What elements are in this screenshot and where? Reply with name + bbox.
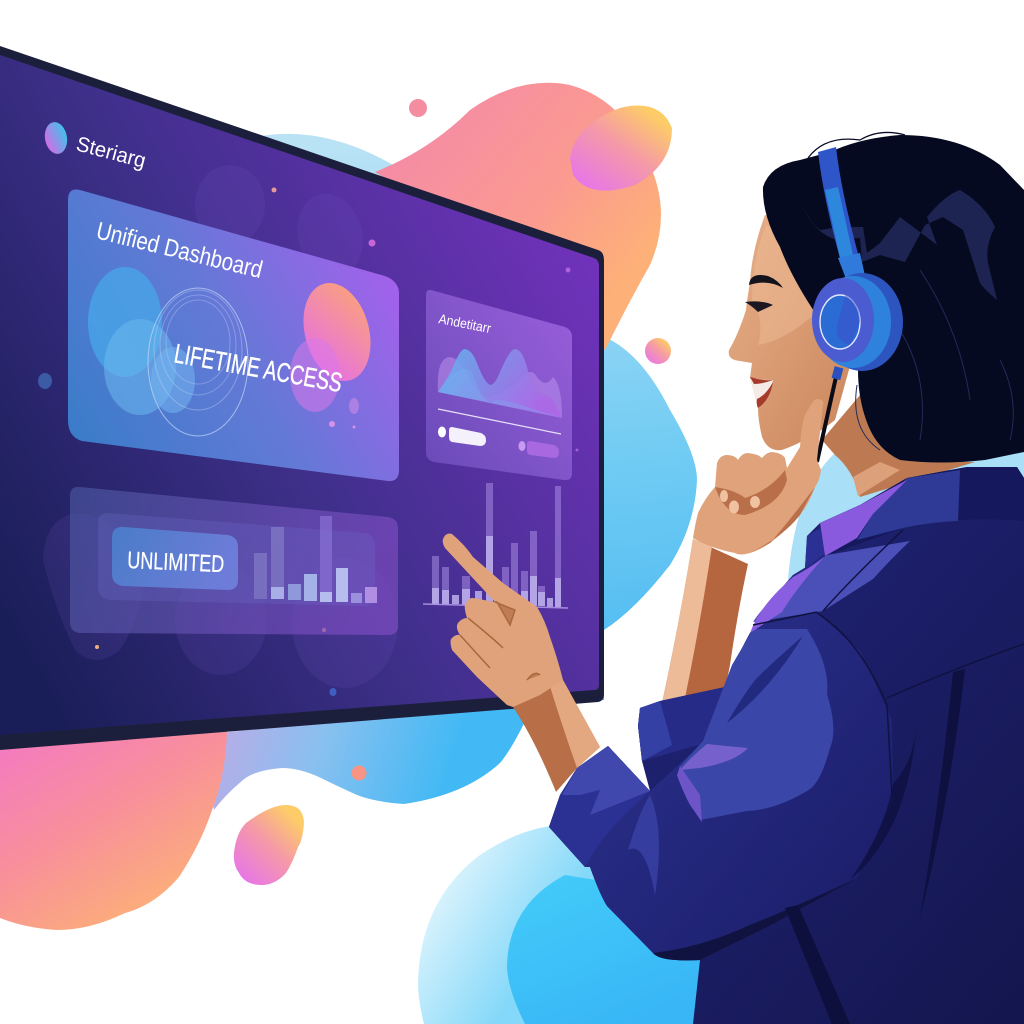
face	[729, 215, 860, 450]
blob: blue behind neck	[788, 450, 1024, 580]
neck light	[853, 462, 900, 496]
eyebrow	[749, 275, 783, 288]
panel title: Unified Dashboard	[94, 218, 265, 284]
logo mark	[44, 122, 68, 154]
panel: area chart	[426, 290, 572, 480]
faint background shapes	[43, 228, 396, 688]
blob: coral upper	[375, 83, 661, 350]
forearm pointing	[513, 680, 600, 792]
forearm light	[545, 670, 600, 768]
headphone band	[818, 147, 866, 286]
hair back strands	[808, 132, 905, 158]
hair highlight	[802, 190, 997, 300]
shoulder purple	[750, 556, 825, 633]
blob: coral lower left	[0, 730, 227, 930]
sleeve inner purple	[677, 766, 702, 822]
button label: UNLIMITED	[127, 547, 225, 578]
hand raised	[693, 399, 823, 554]
blob: bright blue bottom	[507, 875, 720, 1024]
lower cuff	[549, 746, 650, 867]
sleeve highlight	[680, 629, 833, 820]
screen surface	[0, 40, 610, 750]
eye	[745, 301, 773, 312]
blob: lower blue	[200, 700, 535, 810]
dot: coral top	[409, 99, 427, 117]
dot: coral bottom	[352, 766, 366, 780]
blob: pink yellow upper	[570, 106, 672, 191]
collar back panel	[805, 528, 825, 568]
dot: coral right	[645, 338, 671, 364]
screen bezel	[0, 46, 604, 750]
purple legend	[518, 441, 559, 458]
elbow folds	[628, 795, 659, 895]
lower cuff light	[562, 746, 650, 815]
shoulder strap	[785, 905, 850, 1024]
forearm raised	[662, 539, 748, 703]
lips	[750, 377, 773, 408]
inner panel	[98, 513, 375, 606]
bar chart: right	[423, 483, 568, 608]
divider line	[438, 409, 561, 434]
bars	[254, 516, 377, 603]
panel background	[426, 290, 572, 480]
hair	[763, 135, 1024, 462]
screen	[0, 40, 610, 750]
sleeve purple flash	[680, 744, 748, 770]
headphone ear cup	[812, 273, 903, 371]
sleeve dark sliver	[727, 636, 803, 723]
brand name: Steriarg	[74, 133, 148, 173]
circles decoration	[88, 267, 248, 436]
panel background	[70, 487, 398, 635]
floating dots	[38, 188, 578, 696]
violet ellipse	[290, 338, 340, 412]
dark fold sliver	[850, 719, 917, 880]
face light shading	[752, 225, 830, 345]
person	[443, 132, 1024, 1024]
panel: unlimited bars	[70, 487, 398, 635]
blob: pink yellow lower	[234, 805, 304, 885]
neck	[822, 395, 975, 497]
upper cuff	[638, 687, 725, 761]
hair strands	[856, 270, 1013, 450]
panel background	[68, 189, 399, 481]
unlimited button	[112, 527, 238, 590]
dark fold strip	[920, 669, 965, 917]
shirt body	[549, 467, 1024, 1024]
hand pointing	[443, 534, 563, 707]
headline: LIFETIME ACCESS	[172, 338, 345, 398]
sleeve hem shadow	[653, 878, 857, 960]
collar	[820, 467, 1024, 556]
panel dots	[329, 398, 359, 428]
shirt seams	[753, 530, 1024, 795]
upper cuff light	[638, 701, 672, 761]
coral ellipse	[304, 283, 370, 381]
headphone cable	[817, 368, 838, 462]
shoulder light	[753, 541, 910, 622]
panel: unified dashboard	[68, 189, 399, 481]
area chart	[438, 349, 562, 418]
hand shading	[715, 470, 815, 553]
blob: pale blue bottom	[418, 825, 720, 1024]
headphone connector	[832, 366, 843, 380]
white legend	[438, 426, 486, 446]
finger shading	[460, 602, 540, 680]
arm light	[662, 539, 712, 703]
collar mid	[857, 470, 960, 540]
mouth	[750, 378, 773, 408]
knuckles	[720, 490, 760, 514]
collar purple	[820, 480, 907, 556]
sleeve	[549, 554, 893, 960]
blob: pale blue upper	[200, 134, 697, 720]
panel title: Andetitarr	[437, 311, 493, 336]
